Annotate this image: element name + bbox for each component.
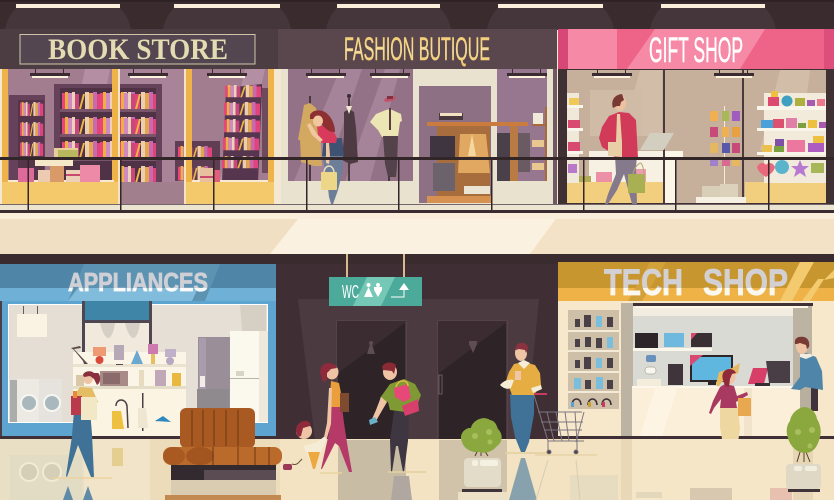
fashion boutique sign: FASHION BUTIQUE — [344, 31, 490, 67]
fridges — [197, 331, 268, 422]
store: gift shop — [558, 29, 834, 205]
shop assistant — [791, 337, 823, 411]
store: book store — [0, 29, 278, 205]
gift shop sign — [558, 29, 834, 70]
fashion boutique sign — [278, 29, 557, 69]
vacuum cleaners — [112, 393, 171, 431]
clothing rack — [427, 107, 547, 203]
mannequin: coat — [298, 96, 322, 181]
mannequin: vest and trousers — [342, 94, 358, 181]
mother in pink trousers — [320, 363, 352, 473]
book store sign: BOOK STORE — [48, 33, 228, 66]
book store yellow pillars and base — [2, 69, 274, 204]
man in yellow sweater — [500, 343, 547, 500]
book store interior — [2, 69, 274, 205]
service counter — [632, 386, 812, 436]
gift shop interior — [558, 69, 834, 205]
lower floor dark header — [0, 254, 834, 264]
tech shop sign — [558, 262, 834, 303]
stacks of books on display — [18, 148, 220, 182]
ceiling with spotlights — [0, 0, 834, 30]
mannequin: hat and cream shirt — [370, 95, 402, 181]
book shelves — [9, 84, 268, 183]
shiny floor with reflections — [0, 439, 834, 500]
icon: direction arrow — [391, 283, 409, 297]
appliances sign: APPLIANCES — [68, 267, 208, 297]
phone display shelves — [568, 310, 619, 409]
gift counter — [579, 133, 683, 203]
game controllers and speaker — [637, 355, 683, 386]
card display stand — [696, 106, 746, 203]
left gift shelf — [567, 93, 583, 183]
WC direction sign: WC — [342, 282, 359, 302]
store: appliances — [0, 264, 276, 439]
gift shop lights — [592, 69, 754, 78]
store: tech shop — [555, 262, 834, 473]
WC direction sign — [329, 254, 422, 306]
woman shopper with ponytail — [52, 371, 112, 500]
tech shop sign: TECH — [604, 262, 683, 303]
planter left — [458, 418, 508, 500]
little girl and dog toy — [283, 421, 327, 470]
man in red sweater — [599, 94, 645, 204]
hanging notice board — [17, 306, 47, 337]
book store sign — [0, 29, 278, 69]
woman with bag in red top — [307, 110, 344, 207]
washing machines — [10, 379, 62, 422]
tech shop sign: SHOP — [703, 262, 788, 303]
laptops on shelf — [633, 333, 712, 351]
planter right — [786, 407, 821, 492]
man with pink shopping bags — [369, 363, 426, 500]
fashion boutique lights — [306, 69, 547, 78]
lamps and small appliance shelf — [71, 344, 186, 436]
tech shop interior — [555, 264, 834, 439]
door: men's restroom — [438, 321, 507, 440]
right gift shelves — [757, 91, 826, 183]
brown leather bench — [163, 408, 282, 500]
appliances shopfront — [0, 301, 276, 439]
woman with hat — [709, 363, 751, 473]
appliances sign — [0, 264, 276, 301]
door: women's restroom — [337, 321, 406, 440]
glass balustrade railing — [0, 157, 834, 210]
icon: male — [374, 283, 382, 297]
central wall with restrooms — [276, 264, 558, 440]
store: fashion boutique — [278, 29, 557, 207]
upper floor walkway — [0, 204, 834, 254]
book store hanging lights — [30, 69, 247, 78]
gift shop sign: GIFT SHOP — [649, 31, 743, 70]
shopping cart — [534, 393, 597, 500]
icon: female — [364, 283, 373, 297]
cash register and tablet — [748, 361, 790, 386]
fashion boutique facade — [281, 69, 557, 205]
computer monitor — [690, 355, 733, 385]
